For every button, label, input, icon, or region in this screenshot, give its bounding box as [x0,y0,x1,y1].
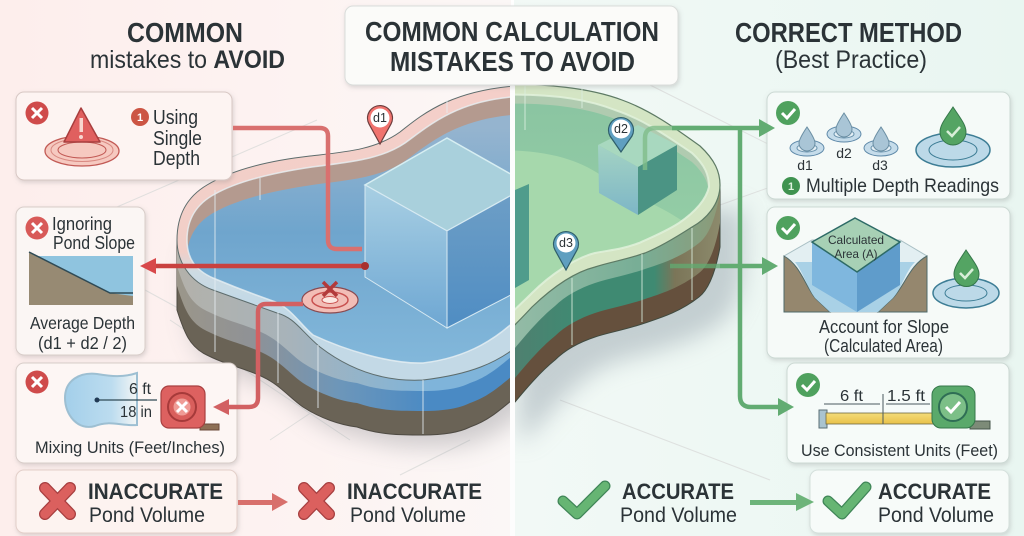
caption: Average Depth [30,313,135,333]
number badge [782,177,800,195]
right heading: CORRECT METHOD [735,17,962,48]
label: Ignoring [52,214,112,234]
panel: ignoring pond slope [16,207,145,355]
icon: green check [563,486,605,514]
icon: green tape measure [932,386,990,429]
title box: MISTAKES TO AVOID [390,46,635,77]
left heading: COMMON [127,17,243,48]
label: Pond Volume [89,504,205,527]
icon: mini pond with dimensions: 18 in [120,404,152,421]
pin d1: d1 [373,111,387,125]
small depth cube [598,125,677,215]
arrow: red result [238,493,288,511]
pond ground shadow right [519,209,744,444]
pin d3 [554,232,578,270]
second inaccurate result [304,479,482,527]
small depth drops: d1 [797,157,813,173]
caption: (Calculated Area) [824,336,943,356]
icon: yellow tape with dimensions: 1.5 ft [887,388,926,405]
arrow: green result [750,493,814,511]
number badge: 1 [788,181,794,193]
icon: red x badge [26,216,48,240]
pond ground shadow left [179,320,510,458]
label: Using [153,107,198,129]
panel: using single depth [16,92,232,180]
small depth drops [790,113,898,173]
pin d1 [367,106,392,144]
label [88,479,223,527]
large cube remainder [515,184,529,288]
icon: red x badge [26,370,48,394]
caption: Multiple Depth Readings [806,176,999,197]
panel: inaccurate pond volume result [16,470,237,533]
panel: accurate pond volume result [810,470,1009,533]
label [347,479,482,527]
right pond half: correct view [515,86,721,403]
number badge: 1 [137,112,143,124]
icon: green check badge [796,373,820,397]
label: Single [153,128,202,150]
label: Pond Volume [350,504,466,527]
caption: Account for Slope [819,317,949,337]
label: Depth [153,148,200,170]
caption: Mixing Units (Feet/Inches) [35,438,225,457]
basin with calculated area block [784,218,927,312]
lighter shallow zone [515,150,681,308]
panel: multiple depth readings [767,92,1010,199]
icon: red x [304,488,329,514]
caption [819,317,949,356]
label [878,479,994,527]
label: ACCURATE [622,479,734,504]
title box [345,6,678,85]
icon: green drop on ripple [933,250,999,308]
label: INACCURATE [88,479,223,504]
basin with calculated area block: Calculated [828,233,884,247]
green connector arrows [645,119,794,416]
red ripple marker [302,282,358,313]
panel: account for slope [767,207,1010,358]
slope diagram [29,252,133,305]
basin with calculated area block: Area (A) [834,247,878,261]
label: Pond Slope [53,233,135,253]
number badge [131,108,149,126]
icon: red x badge [26,102,48,124]
icon: warning triangle on ripple [45,108,119,166]
pin d3: d3 [559,236,573,250]
right heading: (Best Practice) [775,46,927,74]
caption: Use Consistent Units (Feet) [801,441,998,460]
label: Pond Volume [620,504,737,527]
small depth drops: d3 [872,157,888,173]
right heading [735,17,962,74]
icon: mini pond with dimensions: 6 ft [129,381,152,398]
icon: red tape measure [161,386,219,430]
pin d2: d2 [614,122,628,136]
panel: consistent units [787,363,1009,463]
icon: mini pond with dimensions [65,373,157,427]
caption [30,313,135,353]
small depth drops: d2 [836,145,852,161]
background: green-tinted right half [514,0,1024,536]
icon: red x [45,488,70,514]
accurate result [563,479,737,527]
icon: yellow tape with dimensions: 6 ft [840,388,864,405]
label [52,214,135,253]
caption: (d1 + d2 / 2) [38,333,127,353]
label: Pond Volume [878,504,994,527]
label [153,107,202,170]
icon: yellow tape with dimensions [819,388,934,428]
background: red-tinted left half [0,0,511,536]
title box: COMMON CALCULATION [365,16,659,47]
large wrong-volume cube [364,137,510,329]
label: INACCURATE [347,479,482,504]
icon: green check [828,487,866,514]
center divider [510,86,515,536]
label: ACCURATE [878,479,991,504]
left heading: mistakes to AVOID [90,46,285,74]
red connector arrows [140,128,369,415]
illustration: cutaway pond [177,85,744,447]
icon: green drop on ripple [916,107,990,167]
label [620,479,737,527]
left heading [90,17,285,74]
icon: green check badge [776,216,800,240]
left pond half: mistake view [177,85,530,435]
panel: mixing units [16,363,237,463]
icon: green check badge [776,101,800,125]
pin d2 [608,118,634,152]
